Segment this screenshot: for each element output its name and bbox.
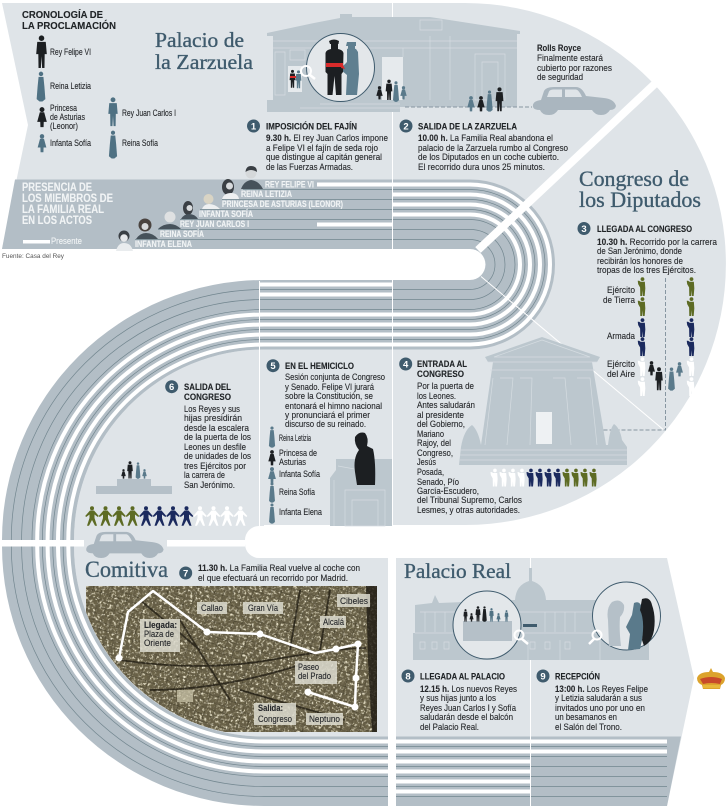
track: white presence bars per lane <box>37 184 667 792</box>
legend: family silhouettes: Infanta Sofía <box>50 138 92 149</box>
legend: family silhouettes <box>36 35 176 159</box>
title: Congreso de los Diputados: Congreso de <box>579 166 689 191</box>
step 1: imposición del fajín: a Felipe VI el fajín de seda rojo <box>266 143 378 154</box>
parade of soldiers <box>85 506 247 526</box>
map labels <box>140 594 370 725</box>
family walking to the Congress <box>648 361 683 391</box>
map labels: Callao <box>201 603 223 614</box>
step 6: salida del Congreso: hijas presidirán <box>184 413 242 424</box>
labels: lane names: REINA LETIZIA <box>241 189 292 199</box>
step 6: salida del Congreso: de unidades de los <box>184 451 251 462</box>
walking family and dashed route to the car <box>405 87 532 112</box>
step 1: imposición del fajín: IMPOSICIÓN DEL FAJÍN <box>266 120 357 132</box>
panel: presence legend text: EN LOS ACTOS <box>22 215 92 227</box>
legend: family silhouettes: Reina Sofía <box>122 138 159 149</box>
map labels: Paseo <box>298 662 319 673</box>
labels: army branches: del Aire <box>607 369 635 380</box>
text: chronology heading: LA PROCLAMACIÓN <box>22 19 116 32</box>
labels: army branches <box>603 285 636 380</box>
step 4: entrada al Congreso: Posada, <box>417 467 444 478</box>
panel: Palacio Real background <box>396 558 694 806</box>
step 4: entrada al Congreso <box>399 358 522 516</box>
step 5: en el hemiciclo: sobre la Constitución, se <box>285 391 373 402</box>
track: lane separator lines <box>11 190 667 796</box>
step 4: entrada al Congreso: al presidente <box>417 410 464 421</box>
legend: family silhouettes: Rey Juan Carlos I <box>122 108 176 119</box>
step 9: recepción: invitados uno por uno en <box>555 703 645 714</box>
legend: guests in the chamber: Infanta Sofía <box>279 469 321 480</box>
labels: lane names: REY FELIPE VI <box>265 180 314 190</box>
text: Rolls Royce note: de seguridad <box>537 72 583 83</box>
step 8: llegada al palacio: LLEGADA AL PALACIO <box>420 672 505 682</box>
step 5: en el hemiciclo: 5 <box>270 361 276 372</box>
map labels: Alcalá <box>323 617 345 628</box>
step 6: salida del Congreso: la carrera de <box>184 470 225 481</box>
step 1: imposición del fajín: 9.30 h. El rey Juan Carlos impone <box>266 133 388 144</box>
step 9: recepción: un besamanos en <box>555 712 617 723</box>
title: Palacio de la Zarzuela <box>155 28 254 74</box>
step 2: salida de la Zarzuela: SALIDA DE LA ZARZUELA <box>418 122 517 132</box>
text: Rolls Royce note <box>537 43 612 83</box>
panel: upper background, Zarzuela and Congreso <box>2 3 726 525</box>
text: Rolls Royce note: cubierto por razones <box>537 63 612 74</box>
step 4: entrada al Congreso: del Tribunal Supremo, Carlos <box>417 495 522 506</box>
step 9: recepción: RECEPCIÓN <box>555 670 600 682</box>
step 2: salida de la Zarzuela: 10.00 h. La Familia Real abandona el <box>418 133 553 144</box>
legend: guests in the chamber: Reina Letizia <box>279 433 311 444</box>
step 6: salida del Congreso: desde la escalera <box>184 423 250 434</box>
gap between Comitiva and Palacio Real <box>388 558 396 808</box>
step 3: llegada al Congreso: LLEGADA AL CONGRESO <box>597 224 692 235</box>
map labels: del Prado <box>298 671 331 682</box>
honour guard: two columns of soldiers <box>638 277 694 396</box>
step 4: entrada al Congreso: 4 <box>403 360 409 370</box>
legend: guests in the chamber: Reina Sofía <box>279 487 316 498</box>
step 3: llegada al Congreso: de San Jerónimo, donde <box>597 246 682 257</box>
step 5: en el hemiciclo: y Senado. Felipe VI jurará <box>285 382 375 393</box>
illustration: family on the podium <box>96 461 172 494</box>
title: Congreso de los Diputados <box>579 166 701 212</box>
step 3: llegada al Congreso: tropas de los tres Ejércitos. <box>597 265 696 276</box>
step 5: en el hemiciclo: y pronunciará el primer <box>285 410 370 421</box>
map labels: Llegada: <box>144 620 177 631</box>
legend: guests in the chamber: Princesa de <box>279 448 317 459</box>
dividing lines between sections <box>260 3 665 806</box>
icon: Rolls Royce car <box>533 87 616 115</box>
panel: presence legend text: LA FAMILIA REAL <box>22 204 104 216</box>
step 7: motorcade text <box>179 563 360 584</box>
step 5: en el hemiciclo: entonará el himno nacional <box>285 401 382 412</box>
labels: lane names: INFANTA ELENA <box>135 239 192 249</box>
step 5: en el hemiciclo: discurso de su reinado. <box>285 419 366 430</box>
map labels: Plaza de <box>144 629 174 640</box>
map labels: Neptuno <box>309 714 340 725</box>
step 6: salida del Congreso: San Jerónimo. <box>184 480 235 491</box>
step 4: entrada al Congreso: García-Escudero, <box>417 486 479 497</box>
step 4: entrada al Congreso: Antes saludarán <box>417 400 475 411</box>
legend: guests in the chamber <box>268 426 323 524</box>
step 8: llegada al palacio: 12.15 h. Los nuevos Reyes <box>420 684 517 695</box>
labels: army branches: Ejército <box>607 359 635 370</box>
map: route line and stops <box>116 591 362 710</box>
step 9: recepción: 9 <box>540 672 546 682</box>
step 6: salida del Congreso: Los Reyes y sus <box>184 404 240 415</box>
step 4: entrada al Congreso: Rajoy, del <box>417 438 451 449</box>
panel: lower left background, Salida and Comitiva <box>74 350 388 736</box>
step 9: recepción: 13:00 h. Los Reyes Felipe <box>555 684 648 695</box>
panel: presence legend text: Presente <box>51 236 82 246</box>
labels: army branches: Ejército <box>607 285 635 296</box>
legend: family silhouettes: Princesa <box>50 103 78 114</box>
legend: family silhouettes: (Leonor) <box>50 121 78 132</box>
white central gap <box>245 526 727 558</box>
title: Congreso de los Diputados: los Diputados <box>579 187 701 212</box>
step 8: llegada al palacio: y sus hijas junto a los <box>420 693 496 704</box>
step 7: motorcade text: 11.30 h. La Familia Real vuelve al coche con <box>198 563 360 574</box>
labels: lane names: PRINCESA DE ASTURIAS (LEONOR) <box>222 199 343 209</box>
step 1: imposición del fajín: que distingue al capitán general <box>266 152 382 163</box>
map labels: Congreso <box>258 714 292 725</box>
step 4: entrada al Congreso: los Leones. <box>417 391 456 402</box>
soldiers saluting in front of the Congress <box>490 469 597 486</box>
callout: reception circle <box>589 582 660 650</box>
dashed route to the Congress door <box>545 278 666 430</box>
labels: lane names: REY JUAN CARLOS I <box>180 219 249 229</box>
step 6: salida del Congreso: tres Ejércitos por <box>184 461 246 472</box>
step 3: llegada al Congreso: recibirán los honores de <box>597 256 683 267</box>
step 1: imposición del fajín: de las Fuerzas Armadas. <box>266 162 353 173</box>
legend: guests in the chamber: Infanta Elena <box>279 507 323 518</box>
labels: lane names: INFANTA SOFÍA <box>199 209 253 219</box>
step 4: entrada al Congreso: Jesús <box>417 457 436 468</box>
icon: royal crown <box>697 668 725 689</box>
legend: guests in the chamber: Asturias <box>279 457 306 468</box>
step 6: salida del Congreso: CONGRESO <box>184 392 231 403</box>
panel: presence legend text <box>22 182 113 246</box>
icon: car of the motorcade <box>86 532 164 558</box>
inner white field of the track <box>0 249 486 280</box>
step 5: en el hemiciclo: Sesión conjunta de Congreso <box>285 372 385 383</box>
text: Rolls Royce note: Finalmente estará <box>537 53 604 64</box>
step 4: entrada al Congreso: Senado, Pío <box>417 477 459 488</box>
legend: family silhouettes: Rey Felipe VI <box>50 47 91 58</box>
panel: presence legend text: LOS MIEMBROS DE <box>22 193 113 205</box>
thick white diagonal divider <box>478 79 660 250</box>
step 4: entrada al Congreso: del Gobierno, <box>417 419 465 430</box>
map labels: Cibeles <box>340 596 368 607</box>
step 1: imposición del fajín: 1 <box>251 122 257 132</box>
step 9: recepción: el Salón del Trono. <box>555 722 622 733</box>
labels: army branches: Armada <box>607 331 636 342</box>
title: Palacio de la Zarzuela: Palacio de <box>155 28 244 52</box>
panel: presence legend text: PRESENCIA DE <box>22 182 92 194</box>
step 6: salida del Congreso: Leones un desfile <box>184 442 246 453</box>
step 5: en el hemiciclo <box>266 359 385 430</box>
title: Palacio de la Zarzuela: la Zarzuela <box>155 50 254 74</box>
step 1: imposición del fajín <box>247 120 388 173</box>
portraits: royal family staircase <box>116 166 263 251</box>
step 6: salida del Congreso: SALIDA DEL <box>184 382 231 393</box>
step 3: llegada al Congreso: 10.30 h. Recorrido por la carrera <box>597 237 718 248</box>
map labels: Salida: <box>258 703 283 714</box>
white stripes beside the car <box>0 540 245 546</box>
legend: family silhouettes: de Asturias <box>50 112 85 123</box>
step 6: salida del Congreso: 6 <box>169 382 174 393</box>
callout: balcony circle <box>453 591 528 659</box>
title: Comitiva: Comitiva <box>85 557 168 582</box>
step 2: salida de la Zarzuela <box>400 120 568 173</box>
step 8: llegada al palacio: 8 <box>405 672 411 682</box>
callout: sash imposition circle <box>301 34 374 102</box>
step 3: llegada al Congreso: 3 <box>581 224 587 235</box>
source note: Fuente: Casa del Rey <box>2 253 65 260</box>
step 8: llegada al palacio: del Palacio Real. <box>420 722 479 733</box>
step 2: salida de la Zarzuela: 2 <box>403 122 409 132</box>
labels: lane names: REINA SOFÍA <box>160 229 204 239</box>
step 7: motorcade text: 7 <box>183 568 188 580</box>
labels: army branches: de Tierra <box>603 295 636 306</box>
step 3: llegada al Congreso <box>578 222 718 276</box>
map labels: Oriente <box>144 638 171 649</box>
labels: lane names <box>135 180 343 249</box>
illustration: Royal Palace <box>413 568 649 660</box>
legend: family silhouettes: Reina Letizia <box>50 81 92 92</box>
step 4: entrada al Congreso: Mariano <box>417 429 444 440</box>
map: route through Madrid base <box>86 586 377 732</box>
step 4: entrada al Congreso: ENTRADA AL <box>417 359 467 370</box>
step 2: salida de la Zarzuela: palacio de la Zarzuela rumbo al Congreso <box>418 143 568 154</box>
step 6: salida del Congreso: de la puerta de los <box>184 432 251 443</box>
step 8: llegada al palacio: Reyes Juan Carlos I y Sofía <box>420 703 517 714</box>
step 4: entrada al Congreso: Lesmes, y otras autoridades. <box>417 505 520 516</box>
text: chronology heading: CRONOLOGÍA DE <box>22 8 103 21</box>
step 5: en el hemiciclo: EN EL HEMICICLO <box>285 361 354 372</box>
illustration: speaker at the podium <box>330 432 392 526</box>
step 4: entrada al Congreso: Congreso, <box>417 448 453 459</box>
map labels: Gran Vía <box>248 603 279 614</box>
step 4: entrada al Congreso: Por la puerta de <box>417 381 474 392</box>
step 9: recepción: y Letizia saludarán a sus <box>555 693 642 704</box>
step 6: salida del Congreso <box>165 380 251 491</box>
step 9: recepción <box>536 670 648 733</box>
step 4: entrada al Congreso: CONGRESO <box>417 369 464 380</box>
illustration: Zarzuela palace <box>267 14 520 112</box>
text: chronology heading <box>22 8 116 32</box>
step 7: motorcade text: el que efectuará un recorrido por Madrid. <box>198 573 348 584</box>
step 2: salida de la Zarzuela: de los Diputados en un coche cubierto. <box>418 152 559 163</box>
step 2: salida de la Zarzuela: El recorrido dura unos 25 minutos. <box>418 162 545 173</box>
step 8: llegada al palacio <box>402 670 517 733</box>
illustration: Congress building <box>459 337 627 465</box>
step 8: llegada al palacio: saludarán desde el balcón <box>420 712 513 723</box>
title: Palacio Real: Palacio Real <box>404 559 511 583</box>
text: Rolls Royce note: Rolls Royce <box>537 43 581 54</box>
running track band <box>2 180 681 806</box>
